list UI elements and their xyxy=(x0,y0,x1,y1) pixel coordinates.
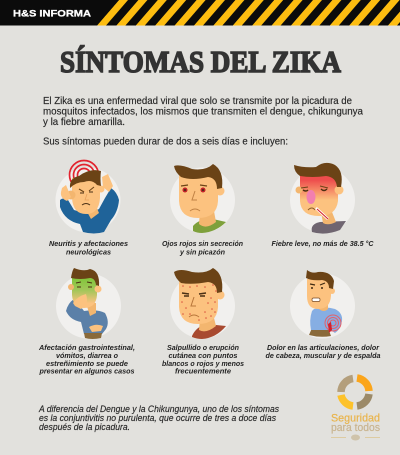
caption 6 xyxy=(266,343,381,360)
caption 4 xyxy=(38,343,135,376)
symptom 1: neuritis xyxy=(56,160,120,234)
caption 5: blancos o rojos y menos xyxy=(162,359,245,368)
closing note xyxy=(38,403,279,432)
caption 5: Salpullido o erupción xyxy=(167,343,239,352)
caption 5: cutánea con puntos xyxy=(168,351,238,360)
caption 5: frecuentemente xyxy=(175,366,232,376)
caption 2: y sin picazón xyxy=(179,248,225,256)
caption 3: Fiebre leve, no más de 38.5 °C xyxy=(272,239,374,248)
closing note: A diferencia del Dengue y la Chikungunya, uno de los síntomas xyxy=(38,403,279,414)
intro text: y la fiebre amarilla. xyxy=(43,117,125,128)
caption 4: Afectación gastrointestinal, xyxy=(38,343,135,352)
caption 2 xyxy=(162,239,243,256)
closing note: es la conjuntivitis no purulenta, que ocurre de tres a doce días xyxy=(39,412,276,423)
caption 1: Neuritis y afectaciones xyxy=(49,239,129,248)
logo: Seguridad para todos xyxy=(331,378,380,440)
caption 6: Dolor en las articulaciones, dolor xyxy=(267,343,380,352)
title: SÍNTOMAS DEL ZIKA xyxy=(60,44,342,79)
logo: Seguridad para todos: Seguridad xyxy=(331,412,380,424)
header bar xyxy=(0,0,400,26)
symptom 5: rash xyxy=(170,268,235,339)
caption 6: de cabeza, muscular y de espalda xyxy=(266,351,381,360)
symptom 3: fever xyxy=(290,163,355,234)
symptom 6: joint pain xyxy=(290,270,355,338)
symptom 4: gastrointestinal xyxy=(56,268,121,339)
caption 4: estreñimiento se puede xyxy=(46,359,129,368)
logo: Seguridad para todos: para todos xyxy=(331,422,380,434)
intro text: El Zika es una enfermedad viral que solo se transmite por la picadura de xyxy=(43,96,352,107)
caption 4: vómitos, diarrea o xyxy=(56,351,118,360)
caption 5 xyxy=(162,343,245,376)
intro text: Sus síntomas pueden durar de dos a seis días e incluyen: xyxy=(43,136,288,148)
caption 1 xyxy=(49,239,129,256)
header bar: H&S INFORMA xyxy=(13,9,91,20)
intro text xyxy=(43,96,363,148)
caption 1: neurológicas xyxy=(66,248,112,256)
icon: ring xyxy=(341,378,369,406)
symptom 2: red eyes xyxy=(170,164,235,233)
caption 4: presentar en algunos casos xyxy=(39,366,135,376)
intro text: mosquitos infectados, los mismos que transmiten el dengue, chikungunya xyxy=(43,106,363,118)
icon: pain rings xyxy=(70,160,98,190)
caption 2: Ojos rojos sin secreción xyxy=(162,239,243,248)
closing note: después de la picadura. xyxy=(39,421,130,432)
